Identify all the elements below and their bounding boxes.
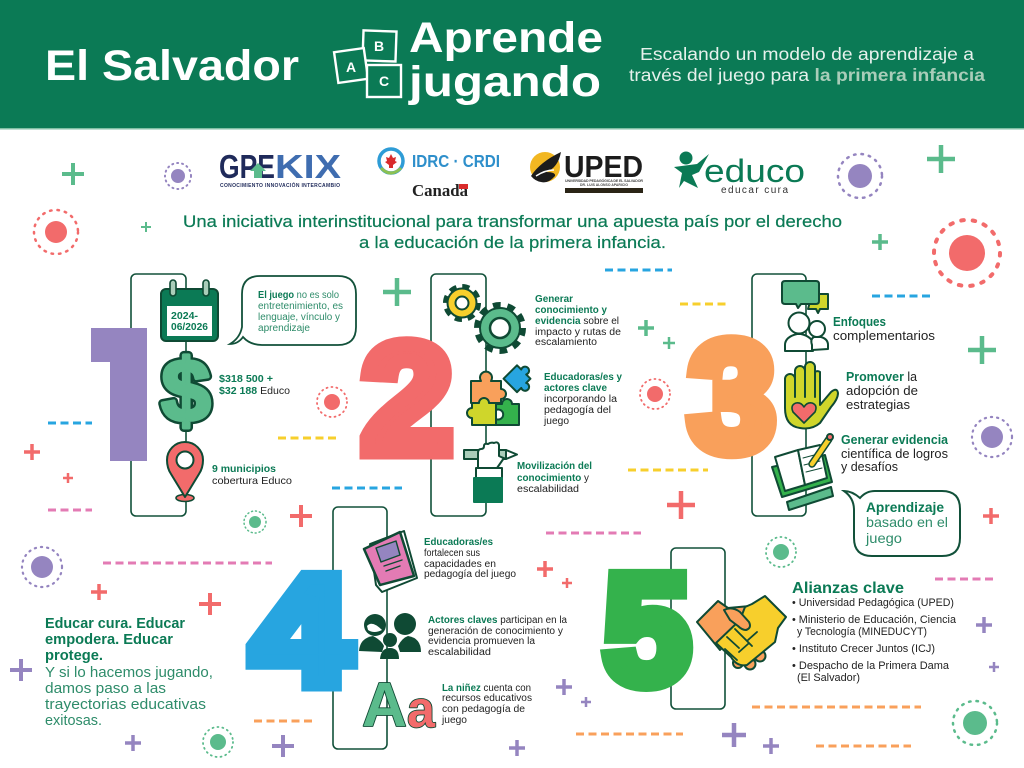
text block: educar cura: trayectorias educativas — [45, 697, 206, 713]
numeral 2: 2 — [362, 312, 452, 485]
logo: UPED: DR. LUIS ALONSO APARICIO — [580, 183, 628, 187]
header subtitle — [629, 44, 985, 85]
header subtitle: través del juego para la primera infancia — [629, 65, 985, 85]
text: alianzas clave: • Instituto Crecer Juntos (ICJ) — [792, 643, 935, 655]
icon: raised hand with heart — [785, 362, 838, 428]
text: movilizacion: conocimiento y — [517, 473, 589, 484]
main title — [408, 14, 603, 106]
callout: aprendizaje: Aprendizaje — [866, 499, 944, 515]
text: generar evidencia: científica de logros — [841, 447, 948, 461]
text: actores claves: escalabilidad — [428, 647, 491, 658]
icon: letters Aa: a — [407, 681, 436, 739]
text: la ninez — [441, 683, 532, 726]
text: generar conocimiento: conocimiento y — [535, 305, 607, 316]
logo: GPE KIX: CONOCIMIENTO INNOVACIÓN INTERCAMBIO — [220, 181, 340, 189]
panel: step 2 — [362, 274, 622, 516]
text: educadoras: pedagogía del — [544, 405, 611, 416]
icon: people group — [359, 613, 421, 659]
text: enfoques — [833, 315, 935, 343]
icon: letters Aa — [362, 671, 436, 740]
callout: el juego: El juego no es solo — [258, 290, 340, 301]
logo: GPE KIX — [219, 148, 341, 189]
text: educadoras: Educadoras/es y — [544, 372, 622, 383]
text: actores claves: Actores claves participan en la — [428, 615, 568, 626]
country title: El Salvador — [45, 42, 299, 90]
text block: educar cura: empodera. Educar — [45, 632, 173, 648]
text block: educar cura — [45, 616, 213, 729]
text: la ninez: La niñez cuenta con — [442, 683, 531, 694]
text: movilizacion: escalabilidad — [517, 484, 579, 495]
callout: aprendizaje — [844, 491, 960, 556]
callout: el juego: lenguaje, vínculo y — [258, 312, 340, 323]
panel: step 4 — [251, 507, 568, 749]
text: promover: adopción de — [846, 384, 918, 398]
logo: UPED: UPED — [564, 149, 643, 184]
text: alianzas clave: y Tecnología (MINEDUCYT) — [797, 626, 927, 638]
text: movilizacion — [517, 461, 592, 495]
text: la ninez: juego — [441, 715, 468, 726]
text: educadoras — [543, 372, 622, 427]
text: generar evidencia: Generar evidencia — [841, 433, 949, 447]
panel: step 1 — [73, 274, 356, 516]
budget text — [219, 374, 290, 397]
text: generar conocimiento: escalamiento — [535, 337, 597, 348]
icon: handshake — [697, 596, 786, 670]
text: alianzas clave: • Universidad Pedagógica (UPED) — [792, 597, 954, 609]
logo: Educo: educar cura — [721, 185, 788, 196]
text: generar conocimiento — [535, 294, 621, 348]
text block: educar cura: protege. — [45, 648, 103, 664]
numeral 4: 4 — [251, 545, 351, 717]
logo: GPE KIX: GPE — [219, 148, 275, 185]
text: educadoras: juego — [543, 416, 569, 427]
text: educadoras: actores clave — [544, 383, 607, 394]
text: educadoras fortalecen: pedagogía del juego — [424, 569, 517, 580]
icon: location pin — [167, 442, 203, 502]
main title: jugando — [408, 58, 601, 106]
text: generar conocimiento: evidencia sobre el — [535, 316, 619, 327]
callout: aprendizaje: juego — [865, 530, 902, 546]
icon: book — [364, 531, 417, 592]
text: alianzas clave: Alianzas clave — [792, 580, 904, 597]
text: la ninez: con pedagogía de — [442, 704, 526, 715]
text block: educar cura: damos paso a las — [45, 681, 166, 697]
icon: ABC blocks: B — [374, 38, 384, 54]
text: la ninez: recursos educativos — [442, 693, 532, 704]
callout: el juego: aprendizaje — [258, 323, 311, 334]
logo: Educo: educo — [704, 153, 805, 189]
text: educadoras fortalecen — [424, 537, 517, 580]
text: generar conocimiento: impacto y rutas de — [535, 327, 621, 338]
budget text: $32 188 Educo — [219, 386, 290, 397]
numeral 1: 1 — [73, 299, 171, 494]
intro text — [183, 213, 842, 252]
budget text: $318 500 + — [219, 374, 273, 385]
text block: educar cura: Educar cura. Educar — [45, 616, 185, 632]
logo: UPED: UNIVERSIDAD PEDAGÓGICA DE EL SALVADOR — [565, 178, 643, 183]
intro text: Una iniciativa interinstitucional para transformar una apuesta país por el derecho — [183, 213, 842, 231]
icon: ABC blocks: C — [379, 73, 389, 89]
callout: el juego: entretenimiento, es — [258, 301, 343, 312]
text: promover: estrategias — [846, 398, 910, 412]
icon: hand with pencil — [464, 442, 517, 502]
logo: UPED — [530, 149, 643, 193]
coverage text: cobertura Educo — [212, 476, 292, 487]
numeral 5: 5 — [604, 543, 690, 716]
text: educadoras fortalecen: Educadoras/es — [424, 537, 494, 548]
header band — [0, 0, 1024, 130]
icon: ABC blocks: A — [346, 59, 356, 75]
decorative dashed lines — [48, 270, 993, 746]
text: generar evidencia — [841, 433, 949, 474]
callout: el juego — [230, 276, 356, 345]
text: alianzas clave: • Despacho de la Primera Dama — [792, 660, 950, 672]
icon: puzzle pieces — [467, 361, 539, 425]
coverage text: 9 municipios — [212, 464, 276, 475]
icon: calendar: 2024- — [171, 310, 199, 322]
text: actores claves: generación de conocimiento y — [428, 626, 563, 637]
logo: IDRC CRDI Canada: IDRC · CRDI — [412, 151, 500, 171]
text: educadoras fortalecen: capacidades en — [424, 559, 496, 570]
icon: letters Aa: A — [362, 671, 407, 740]
text: educadoras fortalecen: fortalecen sus — [424, 548, 480, 559]
icon: calendar: 06/2026 — [171, 321, 208, 333]
logo: Educo — [674, 152, 805, 196]
panel: step 5 — [604, 543, 957, 716]
text: actores claves: evidencia promueven la — [428, 636, 536, 647]
coverage text — [212, 464, 292, 487]
logo: IDRC CRDI Canada: Canada — [412, 181, 468, 200]
text block: educar cura: Y si lo hacemos jugando, — [45, 665, 213, 681]
main title: Aprende — [409, 14, 603, 62]
text: alianzas clave — [792, 580, 957, 684]
panel: step 3 — [689, 274, 960, 556]
callout: aprendizaje: basado en el — [866, 514, 948, 530]
icon: ABC blocks — [334, 30, 401, 97]
text: movilizacion: Movilización del — [517, 461, 592, 472]
text block: educar cura: exitosas. — [45, 713, 102, 729]
text: actores claves — [428, 615, 568, 658]
text: educadoras: incorporando la — [544, 394, 617, 405]
text: alianzas clave: (El Salvador) — [797, 672, 860, 684]
icon: people with speech bubbles — [782, 281, 828, 351]
icon: open book with pencil and ruler — [772, 434, 833, 510]
icon: dollar sign: $ — [162, 341, 210, 440]
intro text: a la educación de la primera infancia. — [359, 234, 666, 252]
icon: calendar — [161, 280, 218, 341]
decorative dotted circles — [22, 154, 1012, 757]
text: promover: Promover la — [846, 370, 917, 384]
numeral 3: 3 — [689, 310, 775, 483]
text: alianzas clave: • Ministerio de Educación, Ciencia — [792, 614, 957, 626]
text: enfoques: complementarios — [833, 329, 935, 343]
icon: gears — [447, 288, 521, 349]
text: generar evidencia: y desafíos — [841, 460, 898, 474]
decorative plus signs — [10, 145, 999, 757]
icon: dollar sign: $ — [162, 341, 210, 440]
text: enfoques: Enfoques — [833, 315, 886, 329]
text: generar conocimiento: Generar — [535, 294, 573, 305]
header subtitle: Escalando un modelo de aprendizaje a — [640, 44, 974, 64]
logo: IDRC CRDI Canada — [379, 149, 500, 200]
text: promover — [846, 370, 918, 412]
logo: GPE KIX: KIX — [275, 148, 341, 185]
